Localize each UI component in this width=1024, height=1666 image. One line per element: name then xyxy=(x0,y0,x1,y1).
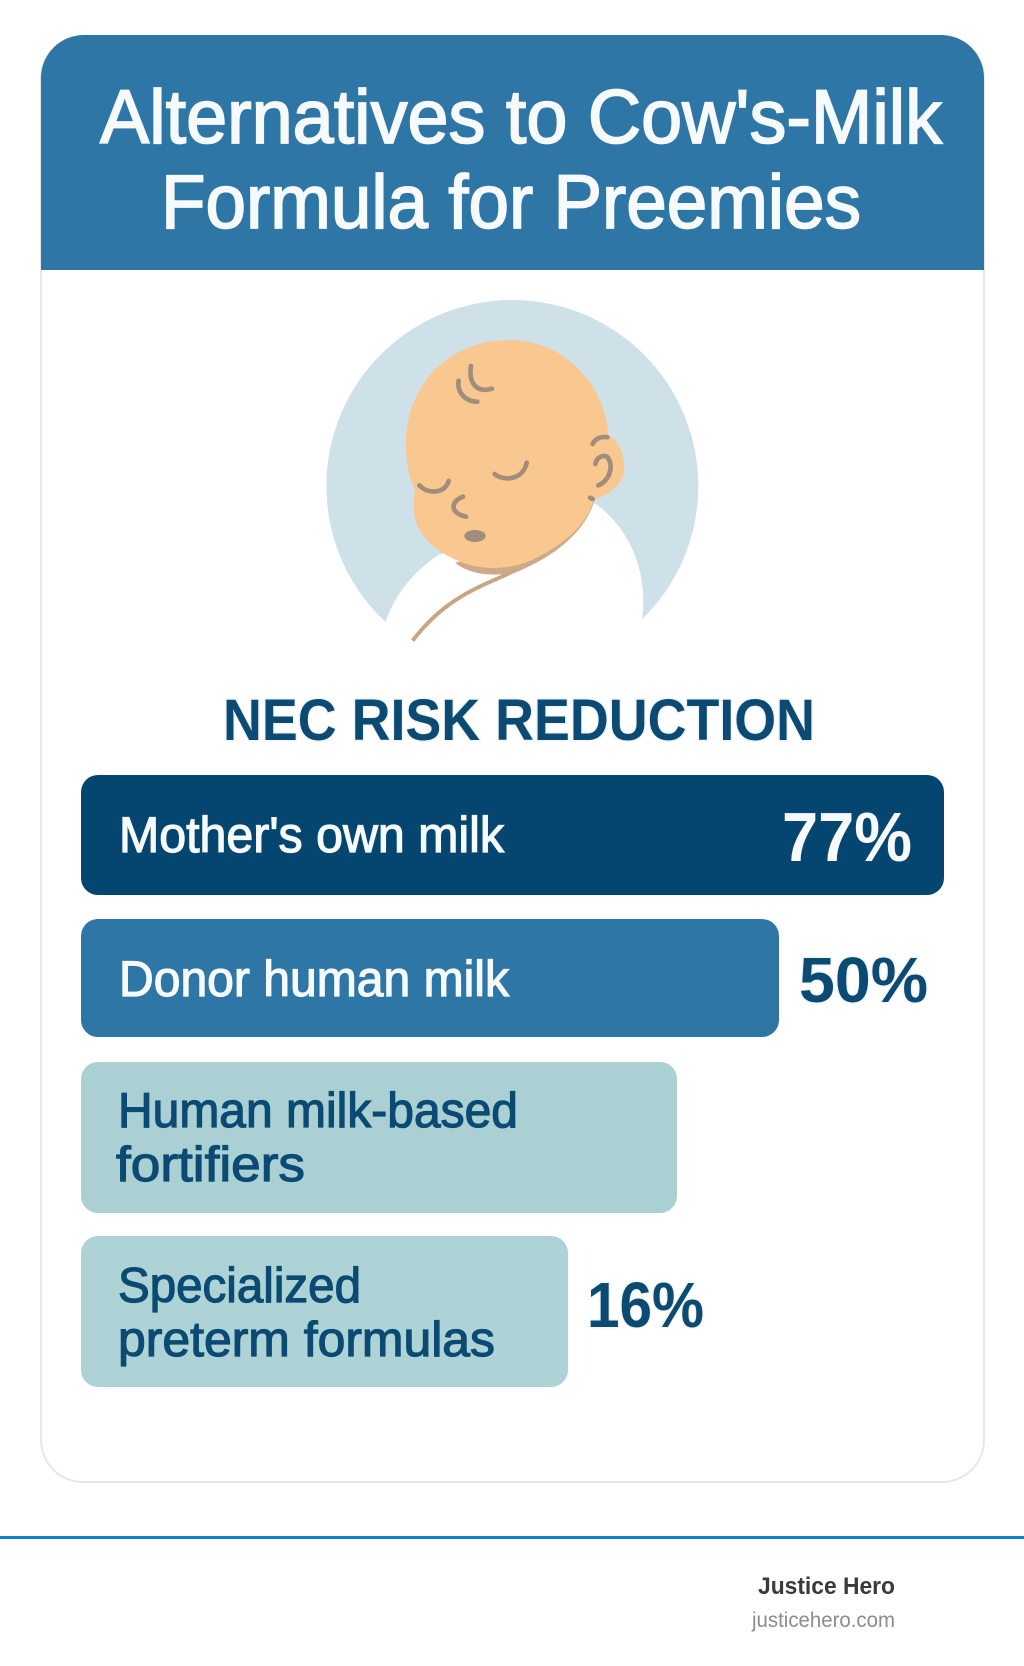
bar: donor human milk xyxy=(81,919,928,1037)
title xyxy=(100,75,943,245)
icon: sleeping baby xyxy=(326,300,698,677)
bar: human milk-based fortifiers: Human milk-based xyxy=(118,1084,518,1138)
facial features xyxy=(419,366,611,517)
footer: brand xyxy=(751,1573,895,1632)
ear xyxy=(593,435,624,500)
bar: specialized preterm formulas: 16% xyxy=(587,1269,704,1341)
backdrop circle xyxy=(326,300,698,672)
bar: human milk-based fortifiers: fortifiers xyxy=(116,1138,305,1192)
bar: specialized preterm formulas: Specialized xyxy=(118,1259,361,1313)
blanket xyxy=(367,503,643,677)
bar: specialized preterm formulas: preterm formulas xyxy=(118,1313,495,1367)
bar: donor human milk: 50% xyxy=(799,944,928,1016)
head xyxy=(406,340,608,568)
footer: brand: justicehero.com xyxy=(751,1609,895,1632)
header band xyxy=(41,35,984,270)
heading: NEC risk reduction: NEC RISK REDUCTION xyxy=(223,688,815,753)
bar: mother's own milk: Mother's own milk xyxy=(119,807,505,863)
panel: main card xyxy=(41,36,984,1482)
bar: donor human milk: Donor human milk xyxy=(119,951,510,1007)
bar: specialized preterm formulas xyxy=(81,1236,704,1387)
mouth xyxy=(464,530,486,542)
bar: mother's own milk: 77% xyxy=(782,798,912,876)
bar: human milk-based fortifiers xyxy=(81,1062,677,1213)
footer: brand: Justice Hero xyxy=(758,1573,895,1600)
title: Formula for Preemies xyxy=(161,160,861,245)
title: Alternatives to Cow's-Milk xyxy=(100,75,943,160)
swaddle line xyxy=(413,569,517,641)
bar: mother's own milk xyxy=(81,775,944,895)
neck shadow xyxy=(455,502,594,575)
